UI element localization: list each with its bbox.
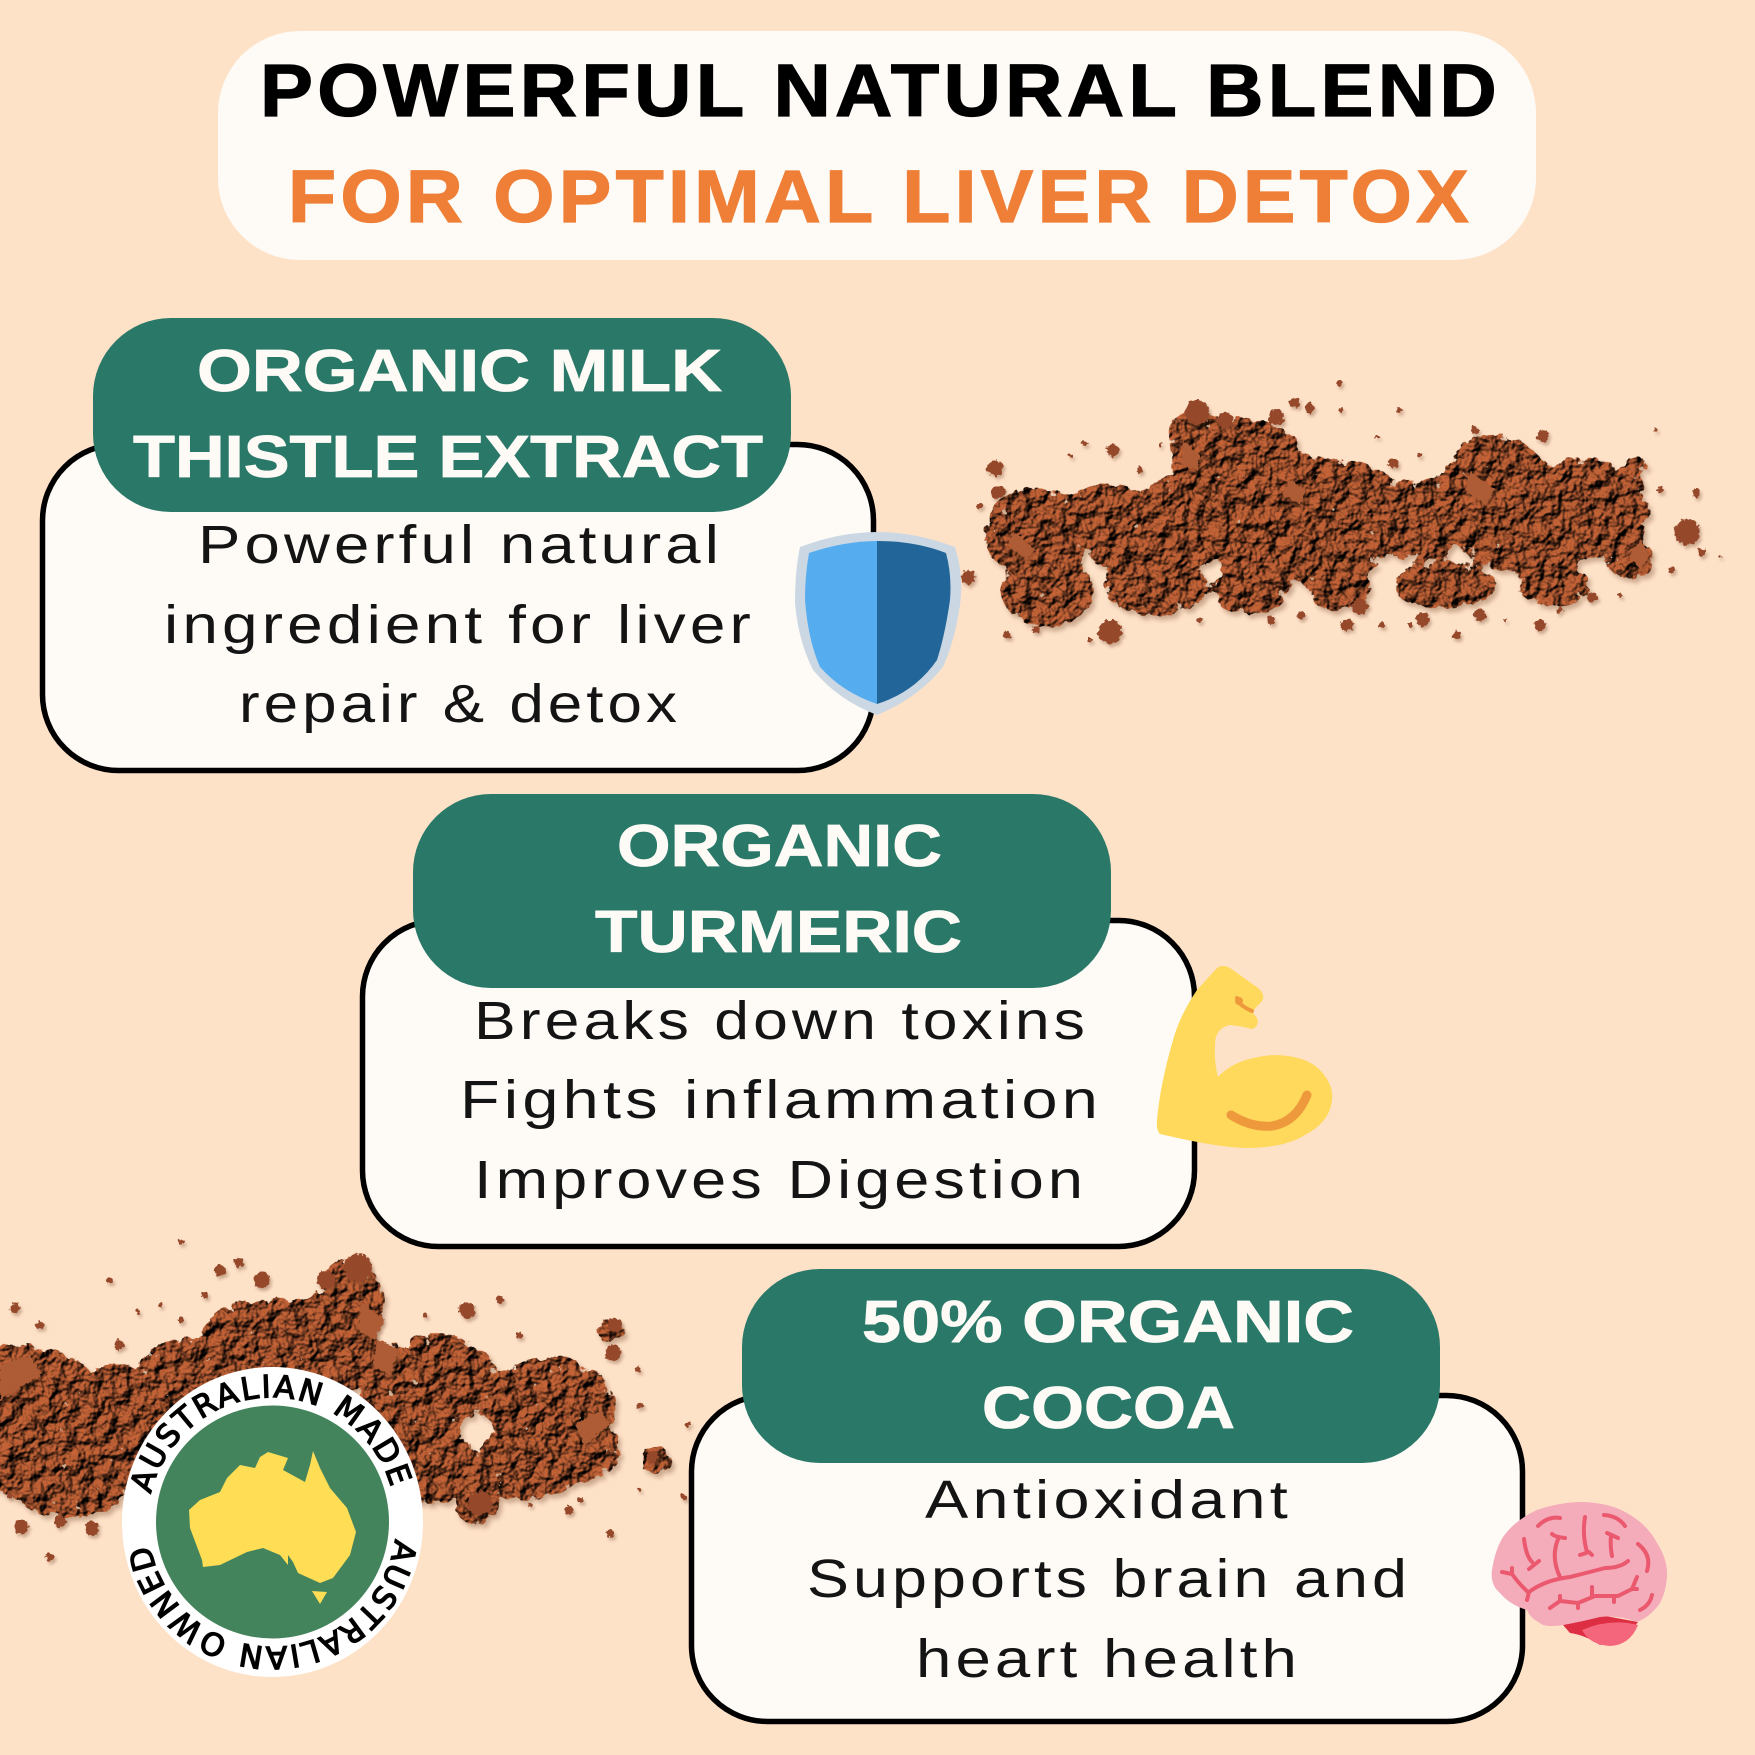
title line 2: FOR OPTIMAL LIVER DETOX — [288, 155, 1473, 238]
description: ingredient for liver — [164, 595, 755, 655]
description: Improves Digestion — [474, 1150, 1087, 1210]
heading pill: COCOA — [982, 1375, 1235, 1441]
description: Powerful natural — [198, 515, 723, 575]
description: Antioxidant — [925, 1470, 1292, 1530]
heading pill: ORGANIC — [617, 813, 942, 879]
heading pill: THISTLE EXTRACT — [133, 424, 763, 490]
description: Fights inflammation — [460, 1070, 1102, 1130]
card body — [692, 1396, 1522, 1722]
heading pill — [93, 318, 791, 512]
badge inner circle — [156, 1406, 389, 1638]
description — [164, 515, 755, 734]
icon: brain — [1492, 1502, 1667, 1646]
description: Supports brain and — [807, 1549, 1411, 1609]
panel: 50% organic cocoa — [692, 1269, 1522, 1722]
heading pill: 50% ORGANIC — [862, 1289, 1354, 1355]
description: heart health — [916, 1629, 1301, 1689]
heading pill: TURMERIC — [595, 899, 962, 965]
title banner — [218, 31, 1536, 260]
heading pill — [742, 1269, 1440, 1463]
badge: australian made: AUSTRALIAN OWNED — [130, 1538, 416, 1670]
heading pill — [413, 794, 1111, 988]
description: Breaks down toxins — [474, 991, 1089, 1051]
badge: australian made — [122, 1367, 423, 1677]
description — [807, 1470, 1411, 1689]
badge text bottom — [148, 1528, 395, 1647]
heading pill: ORGANIC MILK — [197, 338, 722, 404]
badge text top — [151, 1397, 396, 1511]
icon: flexed biceps — [1157, 966, 1332, 1148]
description — [460, 991, 1102, 1210]
panel: organic turmeric — [362, 794, 1194, 1246]
badge disc — [122, 1367, 423, 1677]
icon: shield — [795, 532, 961, 715]
panel: organic milk thistle — [42, 318, 874, 770]
image: cocoa powder bottom left — [0, 1239, 706, 1561]
map of australia — [189, 1451, 356, 1604]
badge: australian made: AUSTRALIAN MADE — [130, 1374, 413, 1495]
card body — [42, 444, 874, 770]
title line 1: POWERFUL NATURAL BLEND — [260, 49, 1501, 132]
image: cocoa powder top right — [961, 380, 1722, 644]
description: repair & detox — [239, 674, 681, 734]
card body — [362, 920, 1194, 1246]
